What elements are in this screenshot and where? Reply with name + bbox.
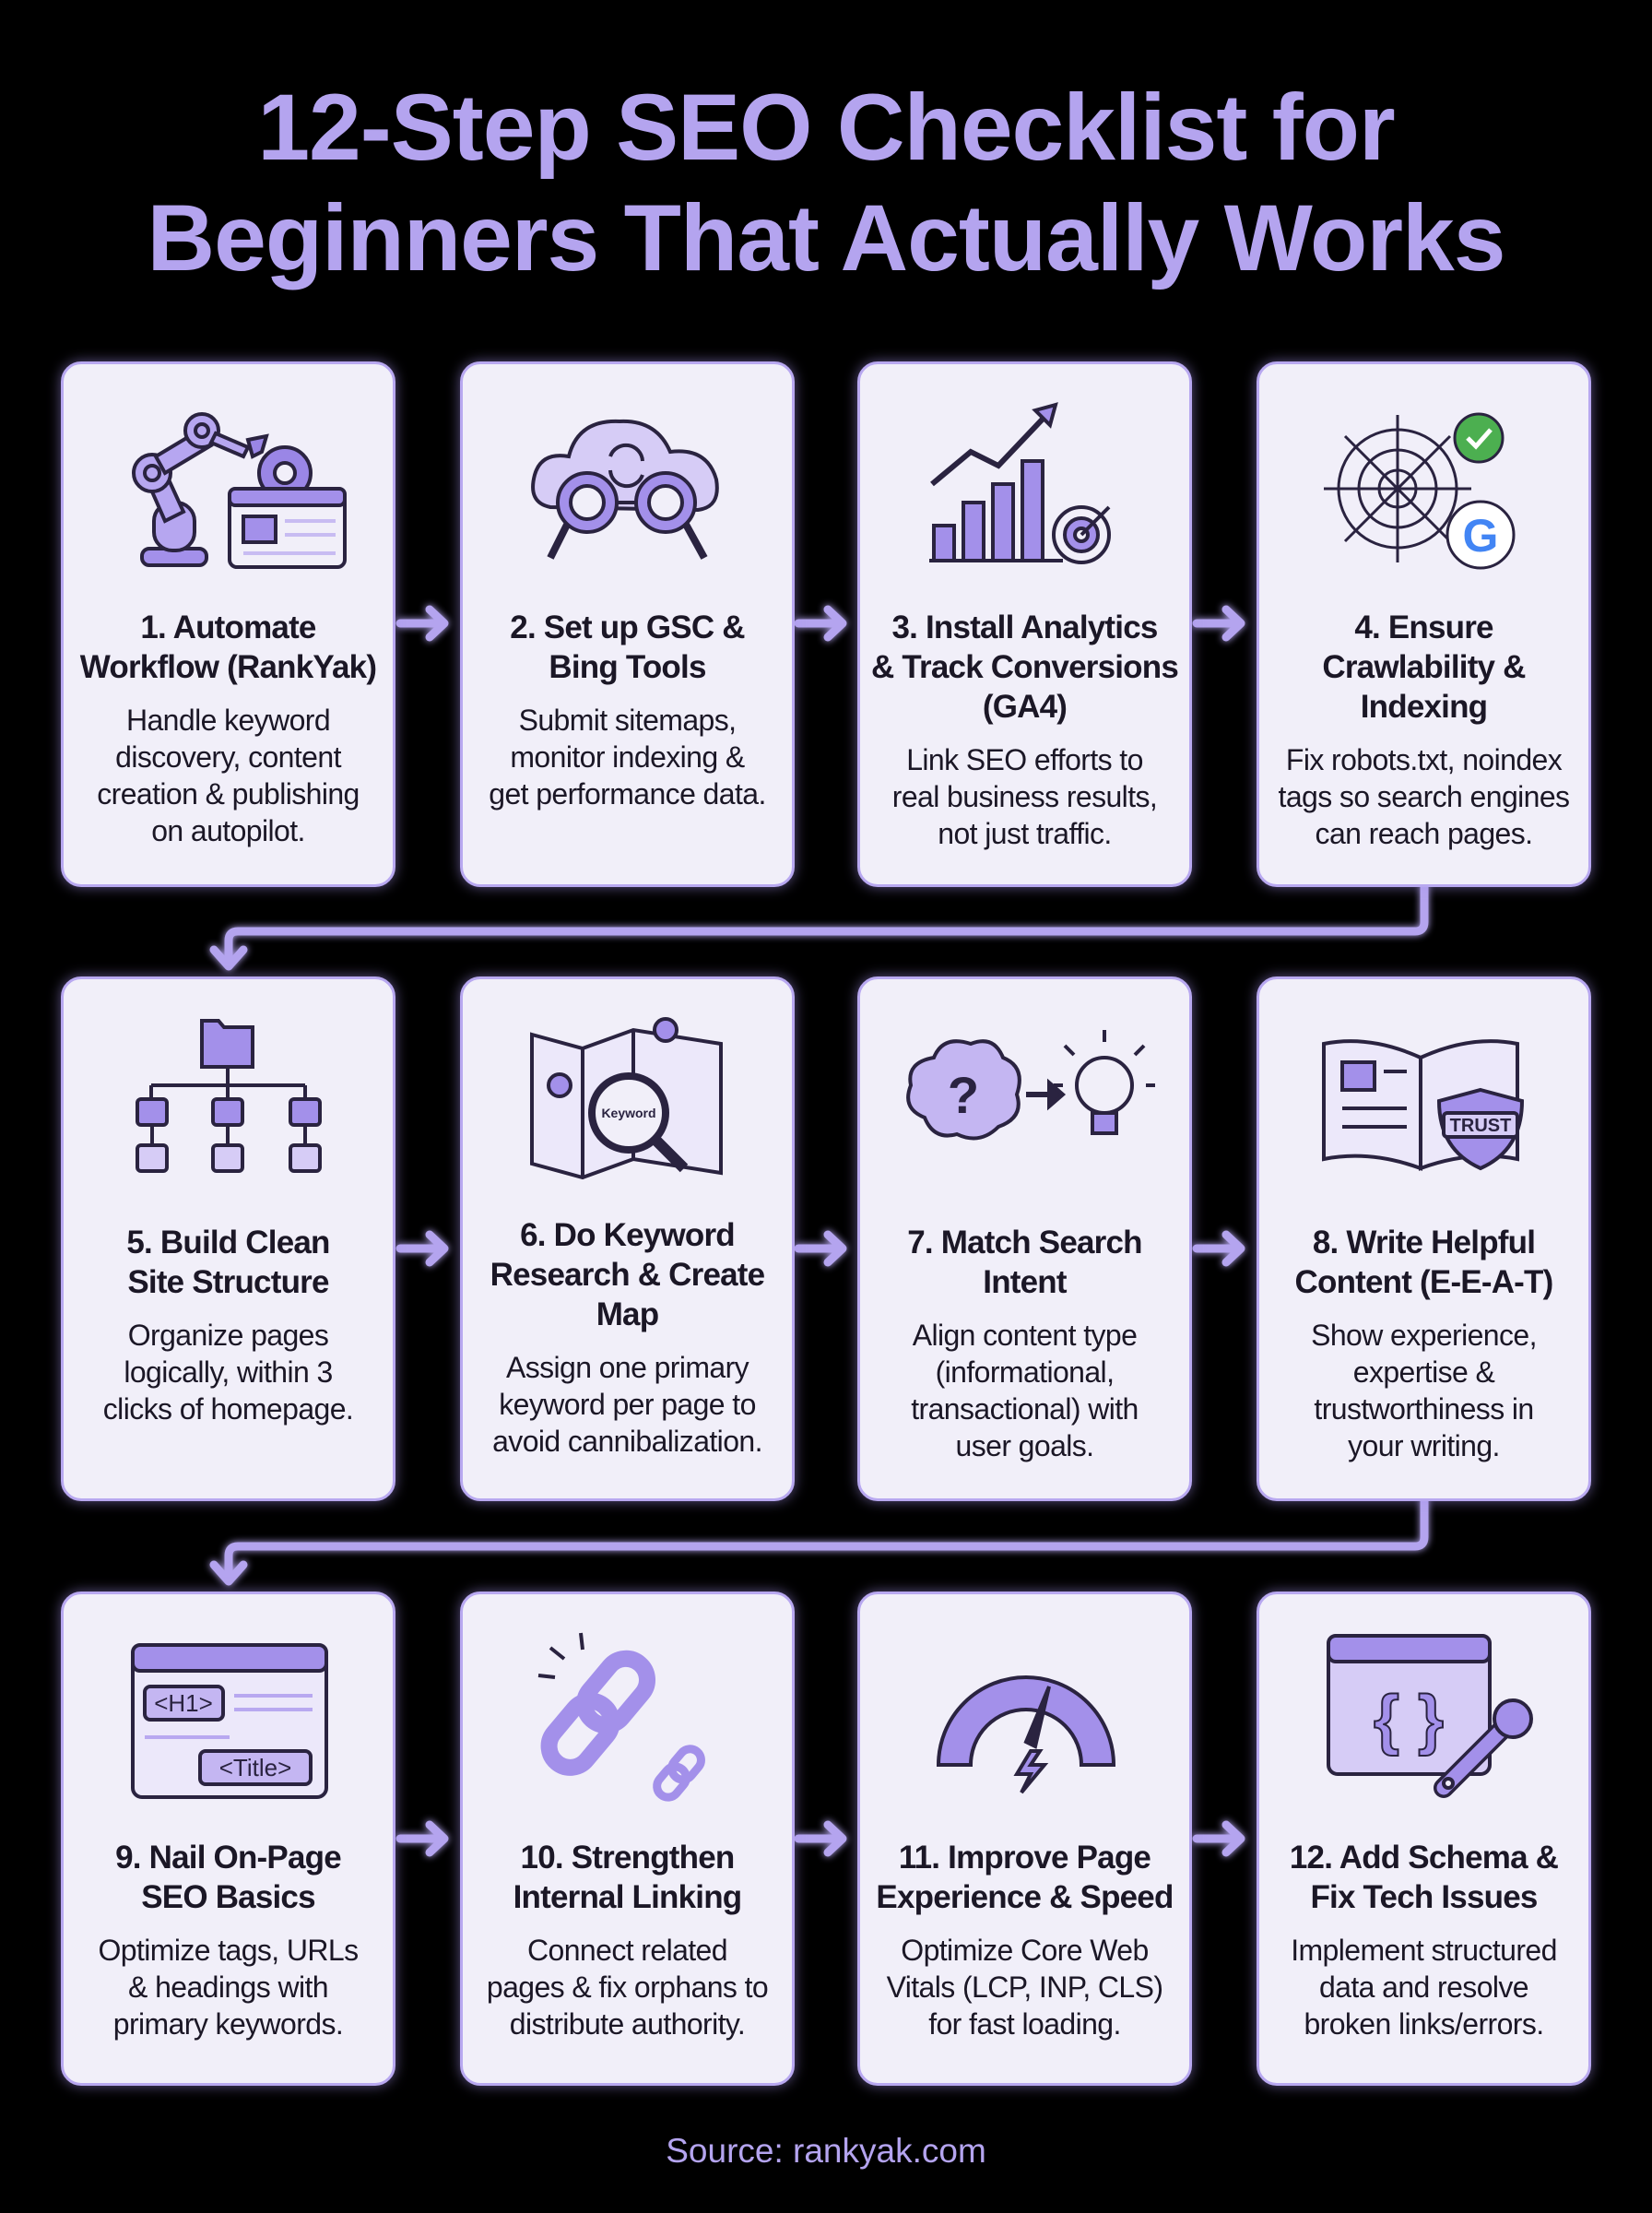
text xyxy=(1279,609,1569,850)
text: for fast loading. xyxy=(928,2007,1121,2041)
text: discovery, content xyxy=(115,740,341,774)
text: get performance data. xyxy=(489,777,766,811)
card 9 xyxy=(61,1592,395,2086)
icon: map with keyword magnifier: Keyword xyxy=(601,1106,656,1120)
text: Workflow (RankYak) xyxy=(80,649,376,685)
text: 1. Automate xyxy=(140,609,316,645)
text: trustworthiness in xyxy=(1314,1392,1534,1426)
text: Assign one primary xyxy=(506,1351,749,1384)
text: Bing Tools xyxy=(549,649,706,685)
icon: brain to lightbulb xyxy=(906,1030,1155,1140)
title xyxy=(147,75,1504,290)
text xyxy=(487,1840,768,2041)
icon: chain links xyxy=(538,1632,705,1802)
text: Show experience, xyxy=(1311,1319,1537,1352)
text: 12. Add Schema & xyxy=(1290,1840,1558,1876)
icon: map with keyword magnifier xyxy=(530,1017,723,1180)
text xyxy=(1295,1225,1552,1462)
icon: schema window with wrench: { } xyxy=(1374,1683,1444,1757)
text: keyword per page to xyxy=(499,1388,756,1421)
text xyxy=(907,1225,1142,1462)
text: avoid cannibalization. xyxy=(492,1425,762,1458)
icon: book with trust shield: TRUST xyxy=(1450,1116,1511,1136)
card 7 xyxy=(857,976,1192,1501)
text: Experience & Speed xyxy=(876,1879,1174,1915)
card 3 xyxy=(857,361,1192,887)
icon: brain to lightbulb: ? xyxy=(948,1066,979,1124)
text: real business results, xyxy=(892,780,1157,813)
icon: site tree xyxy=(136,1019,322,1173)
text: on autopilot. xyxy=(151,814,305,847)
text: primary keywords. xyxy=(113,2007,343,2041)
title: Beginners That Actually Works xyxy=(147,185,1504,290)
text: Content (E-E-A-T) xyxy=(1295,1264,1552,1300)
card 5 xyxy=(61,976,395,1501)
text: (informational, xyxy=(936,1355,1114,1389)
text: not just traffic. xyxy=(938,817,1112,850)
title: 12-Step SEO Checklist for xyxy=(257,75,1395,180)
text: (GA4) xyxy=(983,689,1067,725)
text xyxy=(1290,1840,1558,2041)
text: Implement structured xyxy=(1291,1934,1557,1967)
text: Site Structure xyxy=(127,1264,329,1300)
icon: robot arm xyxy=(132,412,347,569)
text: Vitals (LCP, INP, CLS) xyxy=(887,1970,1162,2004)
text xyxy=(489,609,766,811)
text: your writing. xyxy=(1348,1429,1500,1462)
text: user goals. xyxy=(956,1429,1093,1462)
text: Fix Tech Issues xyxy=(1310,1879,1538,1915)
text: Crawlability & xyxy=(1322,649,1526,685)
text xyxy=(98,1840,359,2041)
icon: web with google and check xyxy=(1324,413,1516,570)
text: 11. Improve Page xyxy=(899,1840,1150,1876)
text: 9. Nail On-Page xyxy=(115,1840,341,1876)
text: Optimize Core Web xyxy=(901,1934,1149,1967)
text: 5. Build Clean xyxy=(126,1225,330,1260)
text: 7. Match Search xyxy=(907,1225,1142,1260)
icon: html tags window: <Title> xyxy=(219,1754,291,1781)
icon: book with trust shield xyxy=(1322,1039,1524,1171)
icon: cloud with magnifiers xyxy=(531,419,719,560)
text: 10. Strengthen xyxy=(521,1840,734,1876)
text xyxy=(871,609,1178,850)
card 11 xyxy=(857,1592,1192,2086)
text: Internal Linking xyxy=(513,1879,741,1915)
text xyxy=(79,609,376,847)
icon: web with google and check: G xyxy=(1463,510,1498,562)
text: Indexing xyxy=(1361,689,1487,725)
text: monitor indexing & xyxy=(510,740,745,774)
card 4 xyxy=(1257,361,1591,887)
text: Intent xyxy=(983,1264,1067,1300)
text: 6. Do Keyword xyxy=(520,1217,735,1253)
text: pages & fix orphans to xyxy=(487,1970,768,2004)
text: Organize pages xyxy=(128,1319,328,1352)
icon: schema window with wrench xyxy=(1327,1634,1533,1798)
card 1 xyxy=(61,361,395,887)
icon: html tags window xyxy=(131,1643,328,1799)
text: Align content type xyxy=(913,1319,1137,1352)
text: Fix robots.txt, noindex xyxy=(1286,743,1562,776)
text xyxy=(876,1840,1174,2041)
text: Optimize tags, URLs xyxy=(98,1934,359,1967)
source footer: Source: rankyak.com xyxy=(666,2132,986,2170)
text: can reach pages. xyxy=(1316,817,1532,850)
text: tags so search engines xyxy=(1279,780,1569,813)
text: broken links/errors. xyxy=(1304,2007,1544,2041)
icon: speedometer xyxy=(937,1675,1115,1794)
text: creation & publishing xyxy=(97,777,360,811)
text: distribute authority. xyxy=(510,2007,745,2041)
text: Handle keyword xyxy=(126,704,330,737)
text: logically, within 3 xyxy=(124,1355,333,1389)
text xyxy=(103,1225,353,1426)
text: 8. Write Helpful xyxy=(1313,1225,1535,1260)
text: Map xyxy=(596,1296,658,1332)
text: & headings with xyxy=(128,1970,328,2004)
icon: growth chart with target xyxy=(929,402,1111,564)
text: 3. Install Analytics xyxy=(891,609,1158,645)
text: & Track Conversions xyxy=(871,649,1178,685)
card 10 xyxy=(460,1592,795,2086)
card 2 xyxy=(460,361,795,887)
text: data and resolve xyxy=(1319,1970,1528,2004)
text: transactional) with xyxy=(911,1392,1139,1426)
text: 2. Set up GSC & xyxy=(510,609,745,645)
text: SEO Basics xyxy=(141,1879,315,1915)
text: expertise & xyxy=(1353,1355,1494,1389)
text: Submit sitemaps, xyxy=(519,704,736,737)
text: Research & Create xyxy=(490,1257,764,1293)
icon: html tags window: <H1> xyxy=(154,1689,213,1717)
text: 4. Ensure xyxy=(1354,609,1493,645)
card 12 xyxy=(1257,1592,1591,2086)
text: clicks of homepage. xyxy=(103,1392,353,1426)
card 6 xyxy=(460,976,795,1501)
card 8 xyxy=(1257,976,1591,1501)
text xyxy=(490,1217,764,1458)
text: Link SEO efforts to xyxy=(906,743,1143,776)
text: Connect related xyxy=(527,1934,727,1967)
